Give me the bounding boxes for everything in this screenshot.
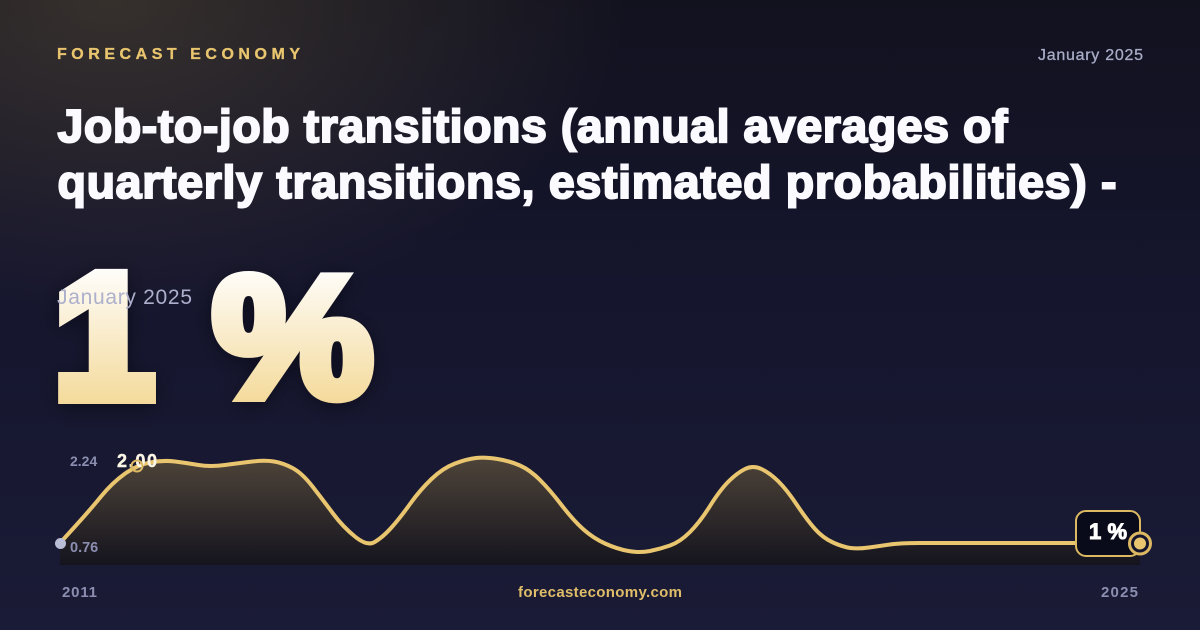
value callout [1076,511,1140,556]
date top right: January 2025 [1038,47,1143,64]
chart line [60,458,1140,552]
brand label: FORECAST ECONOMY [57,46,300,63]
y-axis max label: 2.24 [70,453,97,469]
overlapping date under value: January 2025 [57,286,192,309]
big value: 1 [54,238,154,435]
chart area fill [60,458,1140,565]
big value [54,238,373,435]
title: quarterly transitions, estimated probabilities) - [58,156,1116,208]
end marker [1130,533,1150,554]
big value: % [213,242,373,433]
value callout: 1 % [1089,519,1127,544]
end year: 2025 [1101,584,1138,601]
peak marker [132,460,142,472]
title [58,100,1116,208]
line chart [55,451,1150,565]
y-axis min label: 0.76 [70,540,98,556]
peak value label: 2.00 [117,451,157,471]
start point [55,538,66,549]
title: Job-to-job transitions (annual averages of [58,100,1008,152]
source url: forecasteconomy.com [518,584,682,601]
start year: 2011 [62,584,97,601]
